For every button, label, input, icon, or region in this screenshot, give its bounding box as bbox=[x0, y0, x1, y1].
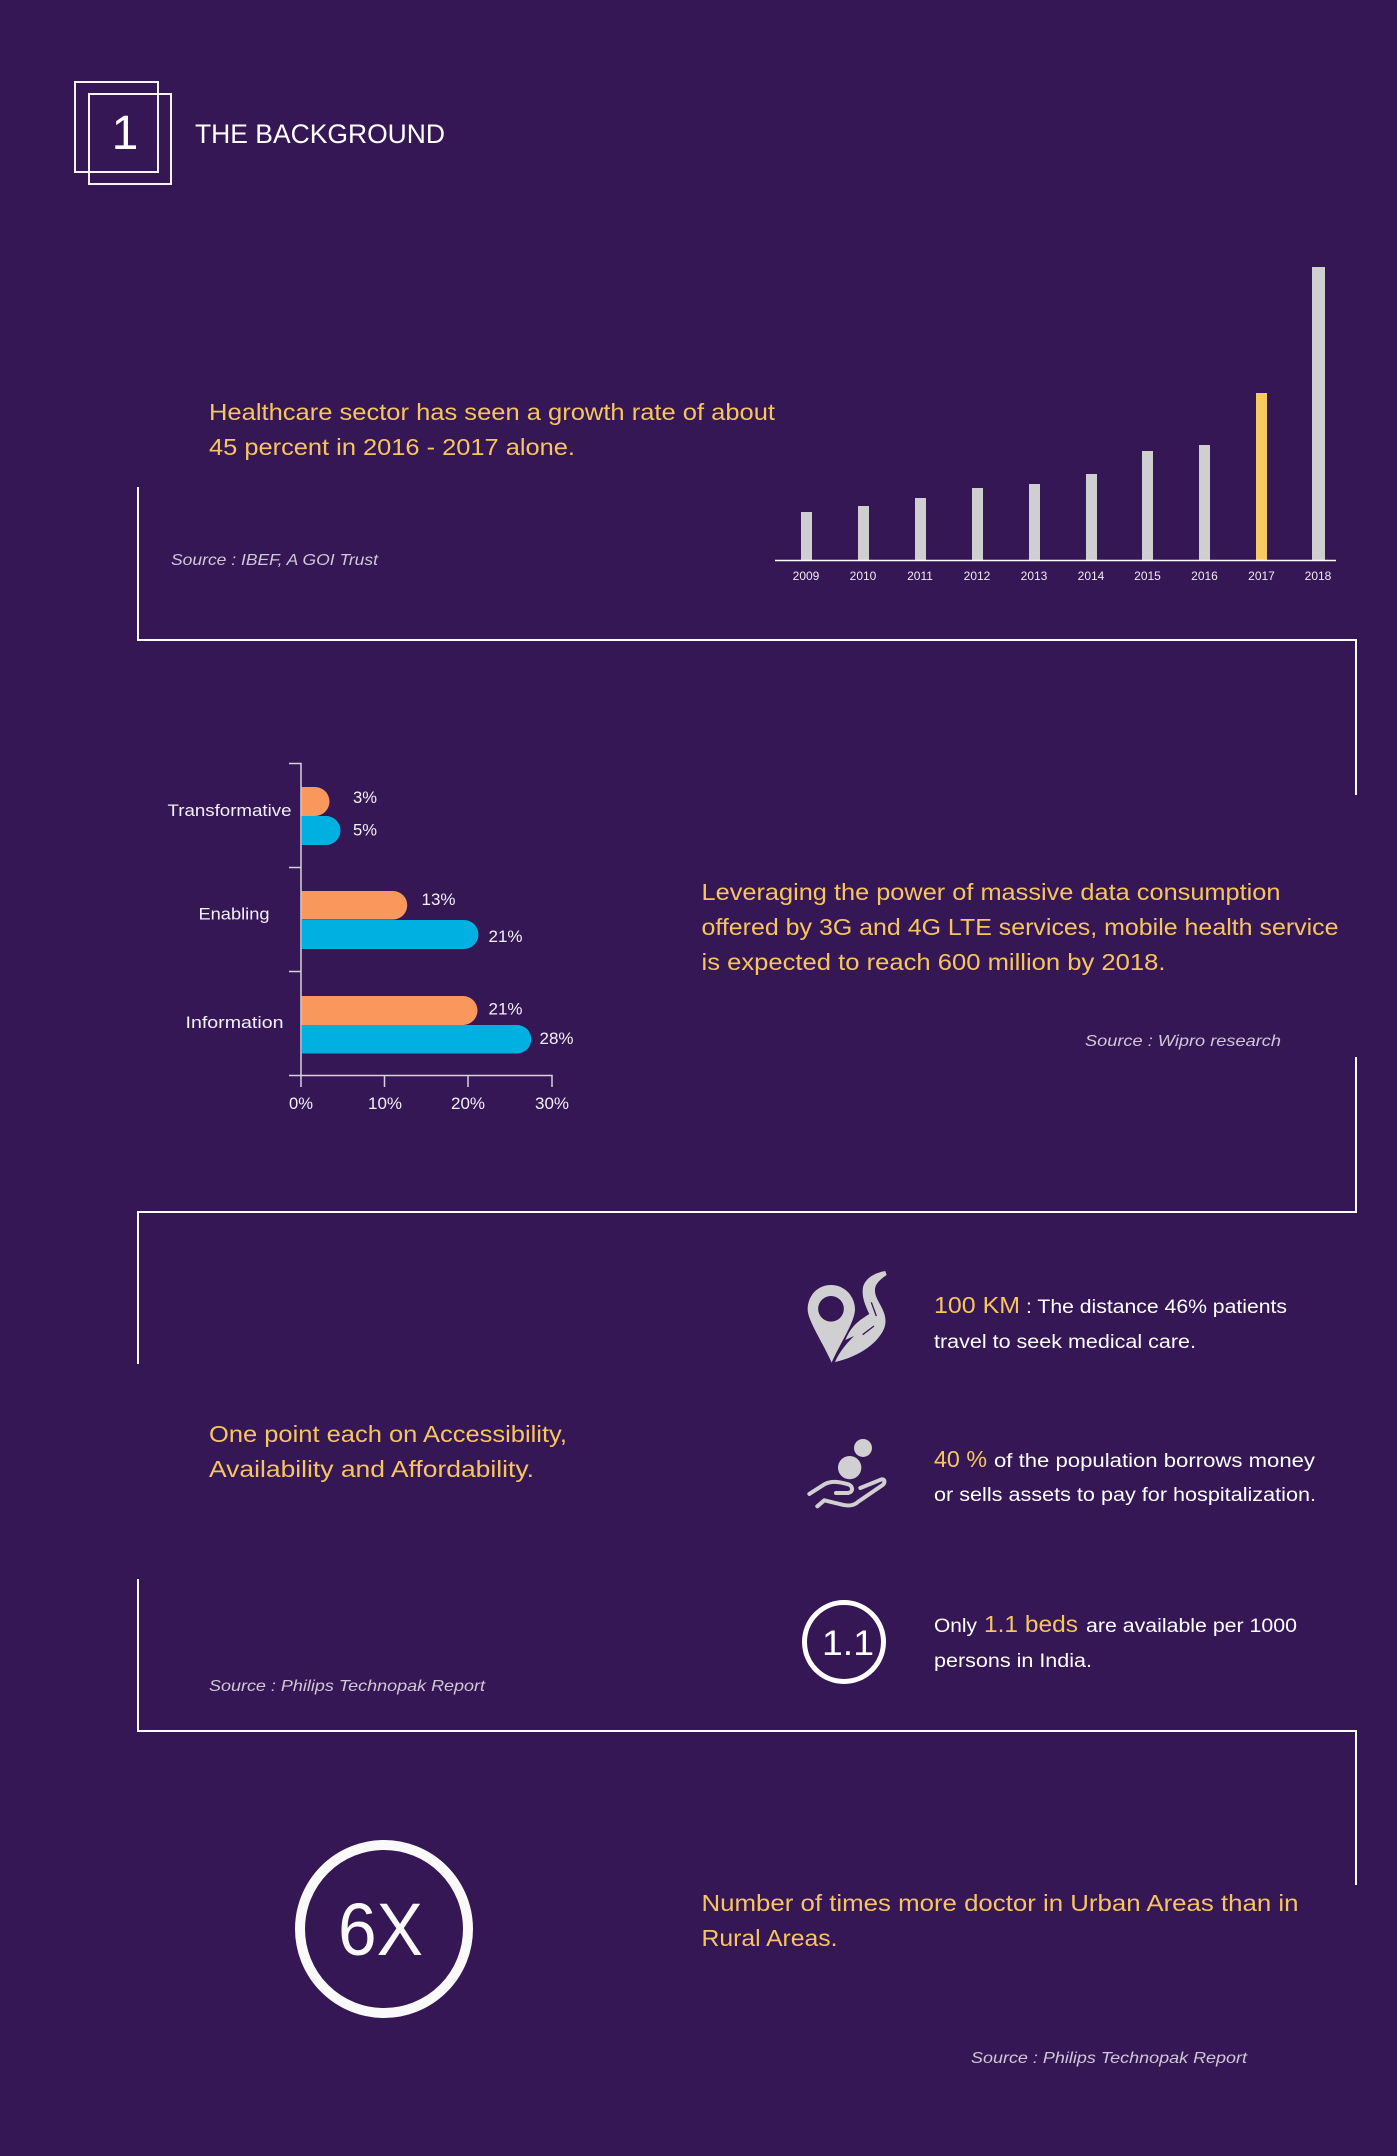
bar chart: yearly growth 2009-2018 bbox=[775, 267, 1336, 583]
stat: 40 percent: or sells assets to pay for hospitalization. bbox=[934, 1485, 1316, 1506]
callout text: doctor ratio bbox=[702, 1890, 1298, 1951]
panel: mobile health bbox=[168, 764, 1338, 1113]
bar chart: yearly growth 2009-2018: 2016 bbox=[1191, 569, 1218, 583]
panel: doctors urban vs rural bbox=[300, 1845, 1298, 2067]
bar chart: transformative, enabling, information: 5% bbox=[353, 820, 377, 840]
bar chart: transformative, enabling, information: 21% bbox=[488, 927, 522, 946]
bar chart: yearly growth 2009-2018: 2009 bbox=[793, 569, 820, 583]
callout text: growth rate bbox=[209, 399, 776, 460]
callout text: three points: Availability and Affordability. bbox=[209, 1456, 534, 1482]
source: Philips Technopak: Source : Philips Technopak Report bbox=[971, 2050, 1248, 2067]
stat: 1.1 beds bbox=[934, 1611, 1297, 1672]
bar chart: transformative, enabling, information: 20% bbox=[451, 1094, 485, 1113]
icon: 1.1 circle: 1.1 bbox=[822, 1624, 874, 1663]
callout text: doctor ratio: Rural Areas. bbox=[702, 1925, 838, 1951]
stat: 100 KM: 100 KM bbox=[934, 1292, 1020, 1318]
section title: THE BACKGROUND bbox=[195, 119, 445, 149]
stat: 100 KM: : The distance 46% patients bbox=[1026, 1297, 1287, 1318]
bar chart: yearly growth 2009-2018: 2017 bbox=[1248, 569, 1275, 583]
bar chart: yearly growth 2009-2018: 2010 bbox=[850, 569, 877, 583]
stat: 40 percent bbox=[934, 1446, 1316, 1506]
panel: healthcare growth bbox=[171, 267, 1336, 583]
section header: 1 The Background bbox=[75, 82, 445, 184]
callout text: growth rate: Healthcare sector has seen a growth rate of about bbox=[209, 399, 776, 425]
stat: 1.1 beds: persons in India. bbox=[934, 1651, 1092, 1672]
bar chart: transformative, enabling, information: 21% bbox=[488, 1000, 522, 1018]
bar chart: yearly growth 2009-2018: 2013 bbox=[1021, 569, 1048, 583]
stat: 40 percent: 40 % bbox=[934, 1446, 987, 1472]
section number: 1 bbox=[112, 107, 138, 160]
icon: 6X circle bbox=[300, 1845, 468, 2013]
bar chart: transformative, enabling, information: Transformative bbox=[168, 801, 292, 820]
bar chart: yearly growth 2009-2018: 2011 bbox=[907, 569, 933, 583]
bar chart: yearly growth 2009-2018: 2014 bbox=[1078, 569, 1105, 583]
icon: hand with coins bbox=[809, 1439, 884, 1506]
callout text: three points: One point each on Accessibility, bbox=[209, 1421, 567, 1447]
bar chart: yearly growth 2009-2018: 2012 bbox=[964, 569, 991, 583]
stat: 1.1 beds: Only bbox=[934, 1616, 978, 1637]
icon: map pin and road bbox=[808, 1271, 887, 1363]
callout text: three points bbox=[209, 1421, 567, 1482]
callout text: mobile health service: offered by 3G and 4G LTE services, mobile health service bbox=[702, 914, 1338, 940]
bar chart: transformative, enabling, information: 0% bbox=[289, 1094, 313, 1113]
bar chart: yearly growth 2009-2018: 2015 bbox=[1134, 569, 1161, 583]
stat: 1.1 beds: 1.1 beds bbox=[984, 1611, 1078, 1637]
bar chart: transformative, enabling, information: Information bbox=[186, 1013, 284, 1032]
callout text: growth rate: 45 percent in 2016 - 2017 alone. bbox=[209, 434, 575, 460]
icon: overlapping number squares bbox=[75, 82, 171, 184]
source: Philips Technopak: Source : Philips Technopak Report bbox=[209, 1678, 486, 1695]
callout text: mobile health service: Leveraging the power of massive data consumption bbox=[702, 879, 1280, 905]
stat: 40 percent: of the population borrows money bbox=[994, 1451, 1316, 1472]
bar chart: transformative, enabling, information: Enabling bbox=[198, 904, 270, 924]
stat: 1.1 beds: are available per 1000 bbox=[1086, 1616, 1297, 1637]
bar chart: transformative, enabling, information: 30% bbox=[535, 1094, 569, 1113]
callout text: doctor ratio: Number of times more doctor in Urban Areas than in bbox=[702, 1890, 1298, 1916]
bar chart: transformative, enabling, information: 28% bbox=[540, 1029, 574, 1048]
stat: 100 KM: travel to seek medical care. bbox=[934, 1332, 1196, 1353]
panel: accessibility, availability, affordability bbox=[209, 1271, 1316, 1695]
bar chart: transformative, enabling, information: 13% bbox=[422, 890, 456, 909]
bar chart: yearly growth 2009-2018: 2018 bbox=[1305, 569, 1332, 583]
stat: 100 KM bbox=[934, 1292, 1287, 1353]
callout text: mobile health service: is expected to reach 600 million by 2018. bbox=[702, 949, 1166, 975]
bar chart: transformative, enabling, information bbox=[168, 764, 574, 1113]
source: IBEF: Source : IBEF, A GOI Trust bbox=[171, 552, 379, 569]
bar chart: transformative, enabling, information: 3% bbox=[353, 788, 377, 807]
icon: 6X circle: 6X bbox=[338, 1888, 423, 1971]
bar chart: transformative, enabling, information: 10% bbox=[368, 1094, 402, 1113]
callout text: mobile health service bbox=[702, 879, 1338, 975]
source: Wipro: Source : Wipro research bbox=[1085, 1033, 1281, 1050]
icon: 1.1 circle bbox=[804, 1602, 884, 1682]
